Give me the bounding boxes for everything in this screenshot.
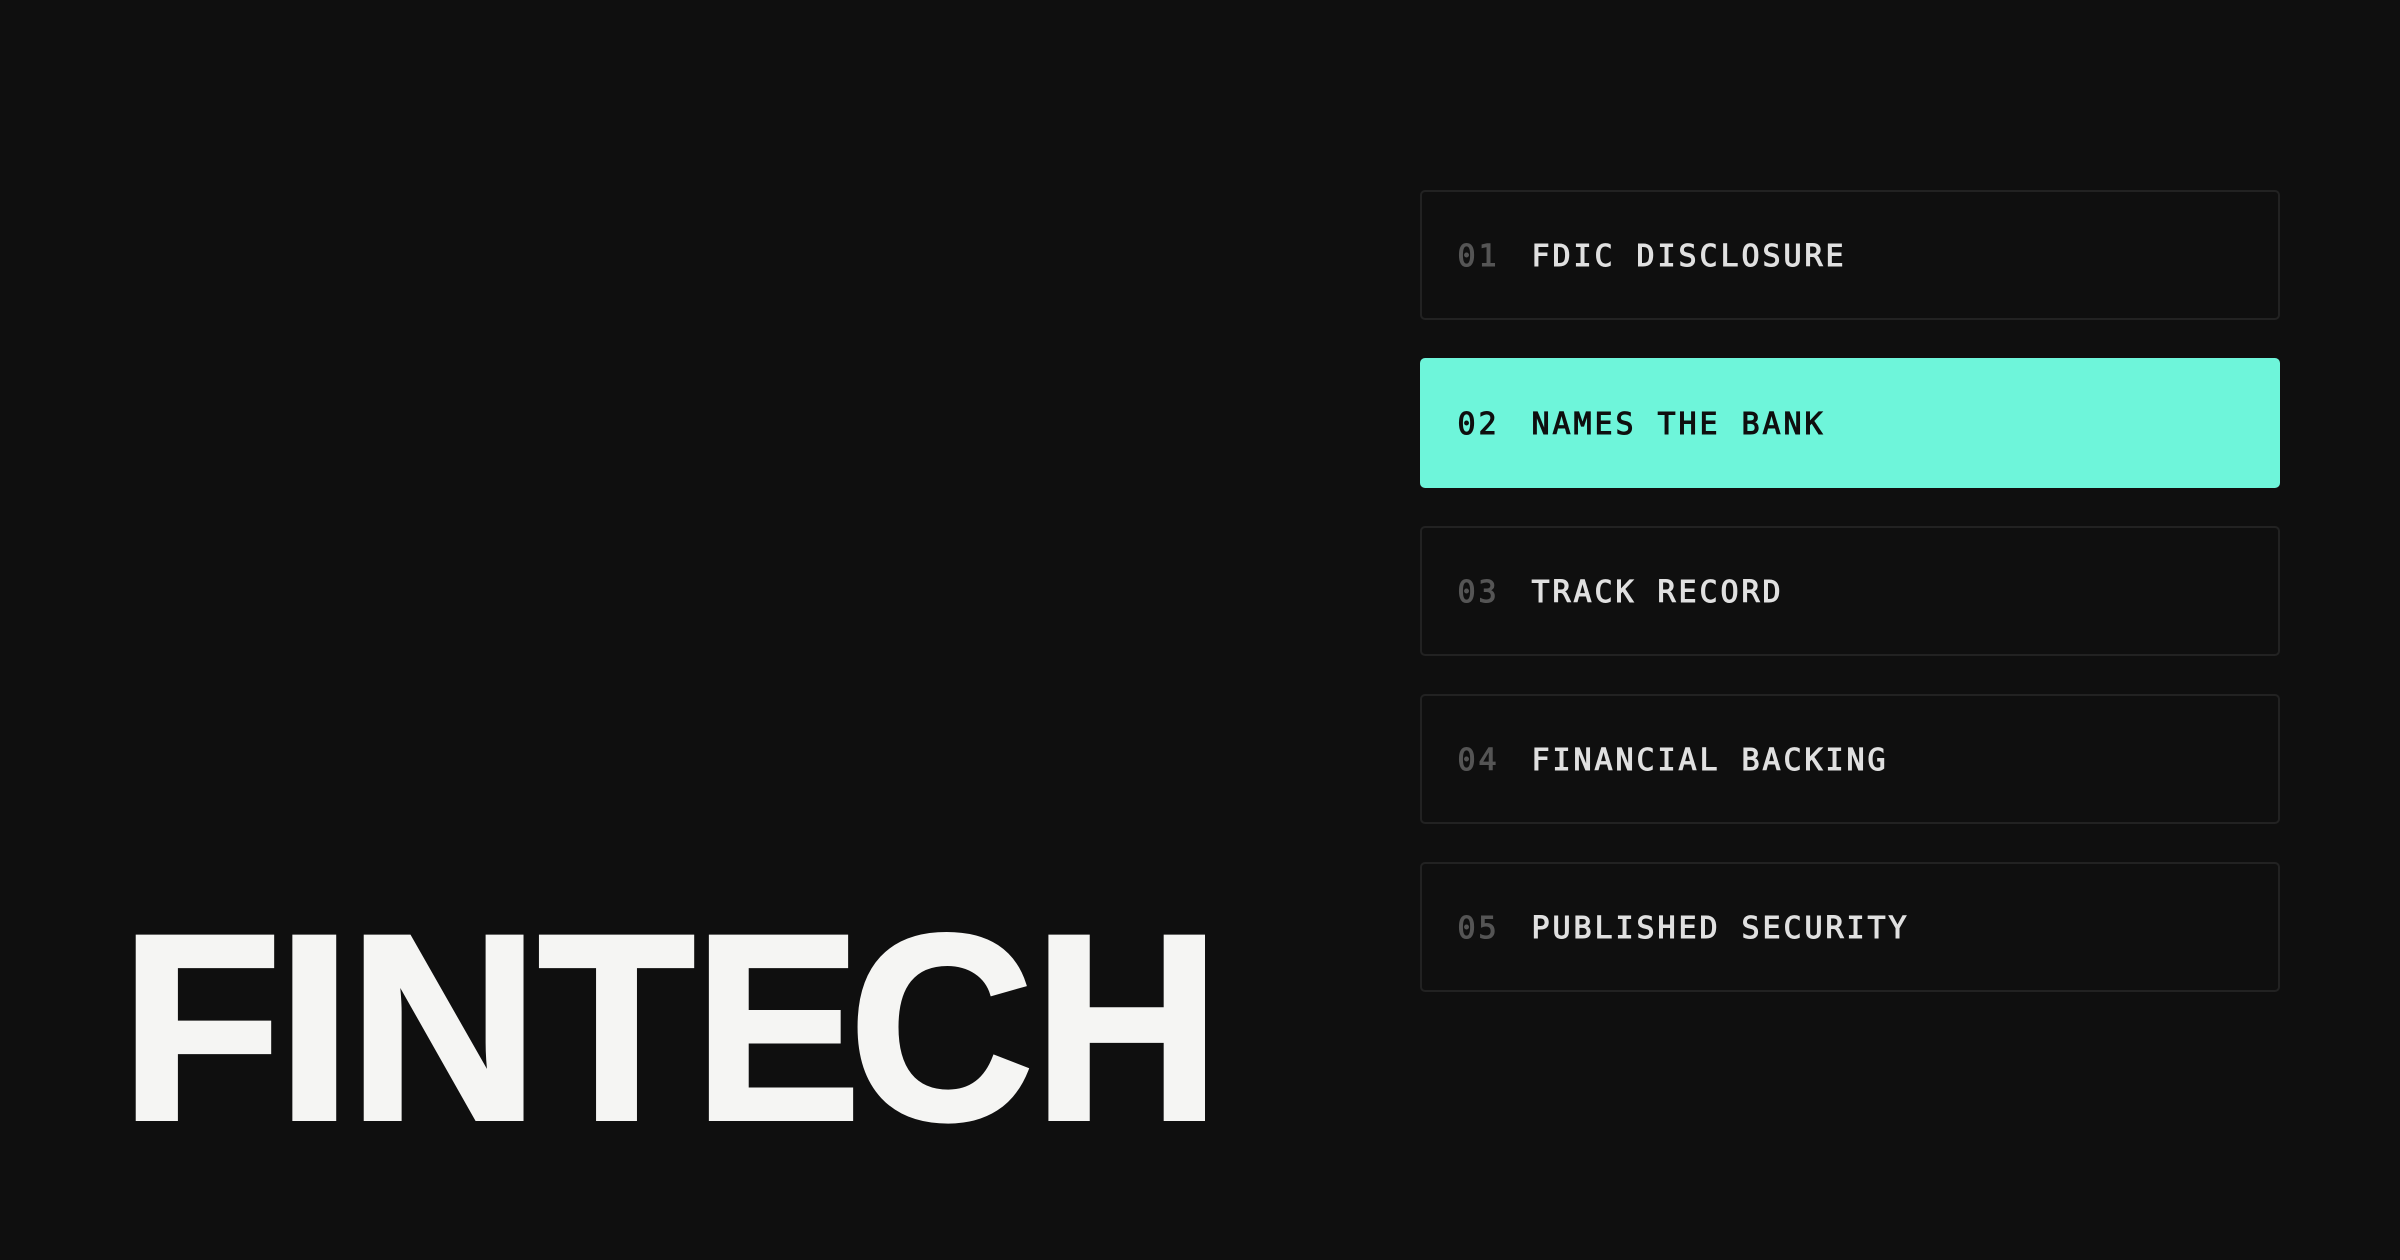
- list item 01: FDIC disclosure: [1420, 190, 2280, 320]
- item label: NAMES THE BANK: [1532, 407, 1826, 442]
- list item 03: track record: [1420, 526, 2280, 656]
- list item 02: names the bank (highlighted): [1420, 358, 2280, 488]
- title: FINTECH: H: [1033, 880, 1221, 1176]
- item number 04: 04: [1458, 743, 1500, 778]
- item number 01: 01: [1458, 239, 1500, 274]
- title: FINTECH: C: [849, 880, 1034, 1176]
- item label: FDIC DISCLOSURE: [1532, 239, 1847, 274]
- item label: TRACK RECORD: [1532, 575, 1784, 610]
- title: FINTECH: I: [276, 880, 353, 1176]
- title: FINTECH: T: [538, 880, 695, 1176]
- title: FINTECH: E: [694, 880, 861, 1176]
- item label: FINANCIAL BACKING: [1532, 743, 1889, 778]
- list item 05: published security: [1420, 862, 2280, 992]
- title: FINTECH: F: [120, 880, 282, 1176]
- item number 03: 03: [1458, 575, 1500, 610]
- item number 02: 02: [1458, 407, 1500, 442]
- title: FINTECH: [120, 880, 1221, 1176]
- item number 05: 05: [1458, 911, 1500, 946]
- list item 04: financial backing: [1420, 694, 2280, 824]
- title: FINTECH: N: [348, 880, 539, 1176]
- item label: PUBLISHED SECURITY: [1532, 911, 1910, 946]
